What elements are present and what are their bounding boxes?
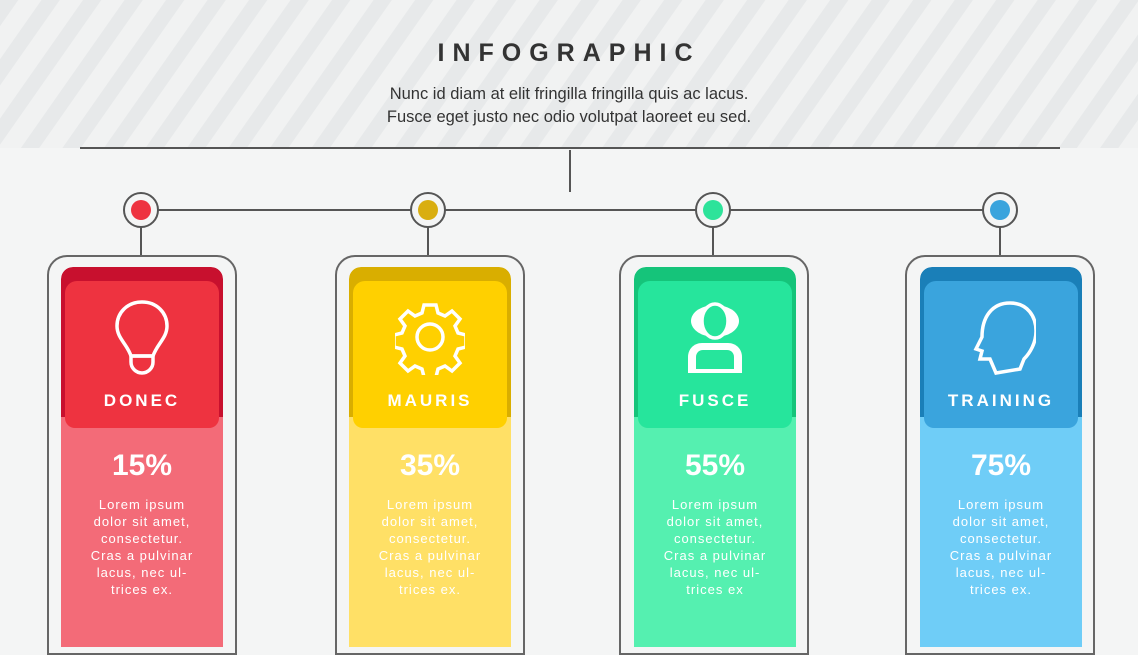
card 2: mauris: 35% <box>400 449 460 482</box>
icon: light bulb <box>115 300 169 375</box>
card 3: fusce: consectetur. <box>674 531 756 546</box>
subtitle <box>387 85 751 126</box>
card 4: training: consectetur. <box>960 531 1042 546</box>
card outline 1 <box>47 255 237 655</box>
icon: gear <box>395 303 465 375</box>
card 4: training <box>920 267 1082 647</box>
card 2: mauris: Cras a pulvinar <box>379 548 481 563</box>
card 1: donec <box>61 267 223 647</box>
card 3: fusce: Lorem ipsum <box>672 497 758 512</box>
title: INFOGRAPHIC <box>438 39 700 67</box>
header background stripes <box>0 0 1138 148</box>
card 1: donec: Lorem ipsum <box>99 497 185 512</box>
card 4: training: TRAINING <box>948 391 1054 410</box>
connector lines <box>80 147 1060 255</box>
card 2: mauris: trices ex. <box>399 582 461 597</box>
card 2: mauris <box>349 267 511 647</box>
card 3: fusce <box>634 267 796 647</box>
card outline 4 <box>905 255 1095 655</box>
card 2: mauris: MAURIS <box>387 391 473 410</box>
icon: head profile <box>974 301 1036 375</box>
card 4: training: trices ex. <box>970 582 1032 597</box>
card 1: donec: Cras a pulvinar <box>91 548 193 563</box>
card 1: donec: 15% <box>112 449 172 482</box>
subtitle: Fusce eget justo nec odio volutpat laoreet eu sed. <box>387 108 751 126</box>
card 2: mauris: lacus, nec ul- <box>385 565 475 580</box>
card 1: donec: DONEC <box>104 391 180 410</box>
card 2: mauris: dolor sit amet, <box>382 514 478 529</box>
subtitle: Nunc id diam at elit fringilla fringilla quis ac lacus. <box>390 85 748 103</box>
icon: person with headset <box>688 302 742 373</box>
card 1: donec: consectetur. <box>101 531 183 546</box>
card 1: donec: lacus, nec ul- <box>97 565 187 580</box>
card outline 3 <box>619 255 809 655</box>
card 3: fusce: Cras a pulvinar <box>664 548 766 563</box>
card 4: training: dolor sit amet, <box>953 514 1049 529</box>
card 4: training: lacus, nec ul- <box>956 565 1046 580</box>
card 2: mauris: consectetur. <box>389 531 471 546</box>
card 4: training: 75% <box>971 449 1031 482</box>
card 3: fusce: 55% <box>685 449 745 482</box>
card 1: donec: dolor sit amet, <box>94 514 190 529</box>
card 3: fusce: lacus, nec ul- <box>670 565 760 580</box>
card 4: training: Lorem ipsum <box>958 497 1044 512</box>
card 2: mauris: Lorem ipsum <box>387 497 473 512</box>
card 4: training: Cras a pulvinar <box>950 548 1052 563</box>
card 3: fusce: dolor sit amet, <box>667 514 763 529</box>
card 3: fusce: FUSCE <box>679 391 751 410</box>
card 1: donec: trices ex. <box>111 582 173 597</box>
card outline 2 <box>335 255 525 655</box>
card 3: fusce: trices ex <box>686 582 744 597</box>
